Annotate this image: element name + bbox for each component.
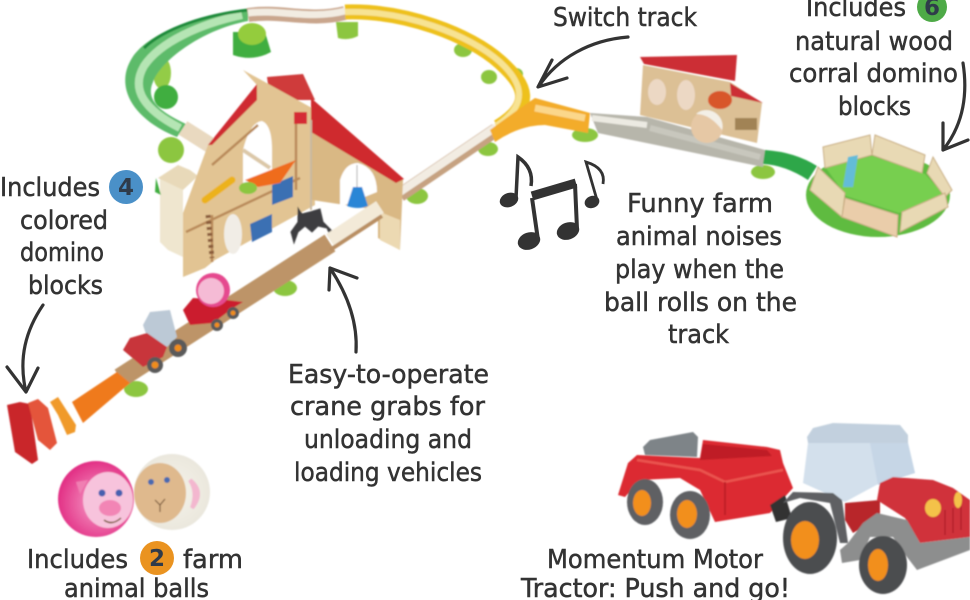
label: momentum motor: Momentum Motor xyxy=(547,545,763,575)
label: crane: Easy-to-operate xyxy=(288,360,489,390)
badge 4 xyxy=(109,170,143,204)
arrow to dominoes xyxy=(7,305,43,392)
label: animal noises: Funny farm xyxy=(627,189,773,219)
yellow upper track xyxy=(345,12,523,127)
corral base xyxy=(806,153,950,237)
crane track xyxy=(120,243,330,378)
green link to corral xyxy=(763,150,817,180)
beige track right of barn xyxy=(400,130,496,195)
badge 2: 2 xyxy=(149,546,165,572)
barn beams xyxy=(186,120,300,262)
arrow to crane xyxy=(329,268,357,352)
barn red roof xyxy=(311,98,404,183)
tractor xyxy=(783,423,970,594)
white post near barn xyxy=(160,177,183,257)
label: animal noises: play when the xyxy=(615,255,784,285)
label: animal noises: animal noises xyxy=(616,222,782,252)
trailer xyxy=(618,432,793,539)
label: corral domino blocks xyxy=(789,0,968,150)
track supports xyxy=(124,22,775,397)
blue bell xyxy=(356,165,358,187)
barn left wall xyxy=(183,70,315,277)
orange ramp xyxy=(72,372,130,423)
right barn post dog xyxy=(380,212,400,250)
label: switch track: Switch track xyxy=(553,3,697,33)
crane rope xyxy=(310,120,312,210)
barn back roof xyxy=(267,74,315,100)
music notes xyxy=(498,157,603,252)
label: farm animal balls xyxy=(27,541,243,600)
label: colored domino blocks: Includes xyxy=(0,173,100,203)
badge 2 xyxy=(140,541,174,575)
badge 4: 4 xyxy=(118,175,134,201)
small trailer xyxy=(183,298,243,325)
label: crane xyxy=(288,268,489,488)
small barn backdrop xyxy=(640,55,737,81)
label: colored domino blocks: domino xyxy=(20,238,104,268)
label: crane: loading vehicles xyxy=(294,458,482,488)
label: crane: unloading and xyxy=(304,425,472,455)
corral blocks xyxy=(810,135,952,237)
label: corral domino blocks: blocks xyxy=(838,92,911,122)
label: colored domino blocks xyxy=(0,170,143,392)
barn interior pictures xyxy=(272,176,293,205)
barn right door xyxy=(340,163,377,207)
sheep ball xyxy=(691,111,723,143)
sheep ball xyxy=(134,454,210,530)
label: farm animal balls: Includes xyxy=(27,545,128,575)
arrow to switch xyxy=(538,37,628,87)
label: corral domino blocks: corral domino xyxy=(789,59,958,89)
pig ball xyxy=(58,461,134,537)
orange switch xyxy=(490,98,590,142)
grey sound track xyxy=(590,113,765,167)
label: corral domino blocks: natural wood xyxy=(795,27,953,57)
beige link to barn xyxy=(183,128,210,145)
beige top track xyxy=(248,13,345,16)
colored dominoes xyxy=(7,397,76,464)
label: animal noises xyxy=(604,189,797,350)
label: momentum motor xyxy=(520,545,790,600)
green curve xyxy=(125,9,248,137)
blue corral domino xyxy=(843,155,858,187)
arrow to corral xyxy=(943,63,968,150)
crane claw xyxy=(291,208,333,243)
label: animal noises: track xyxy=(668,320,729,350)
label: animal noises: ball rolls on the xyxy=(604,288,797,318)
barn xyxy=(183,70,404,277)
big tractor with trailer xyxy=(618,423,970,594)
small tractor xyxy=(143,310,177,347)
label: crane: crane grabs for xyxy=(290,392,485,422)
label: colored domino blocks: blocks xyxy=(28,271,103,301)
marble run track xyxy=(7,9,952,464)
barn right wall xyxy=(312,108,403,250)
label: farm animal balls: farm xyxy=(183,545,243,575)
barn window xyxy=(243,121,272,190)
label: colored domino blocks: colored xyxy=(20,206,108,236)
label: switch track xyxy=(538,3,697,87)
badge 6 xyxy=(917,0,947,22)
